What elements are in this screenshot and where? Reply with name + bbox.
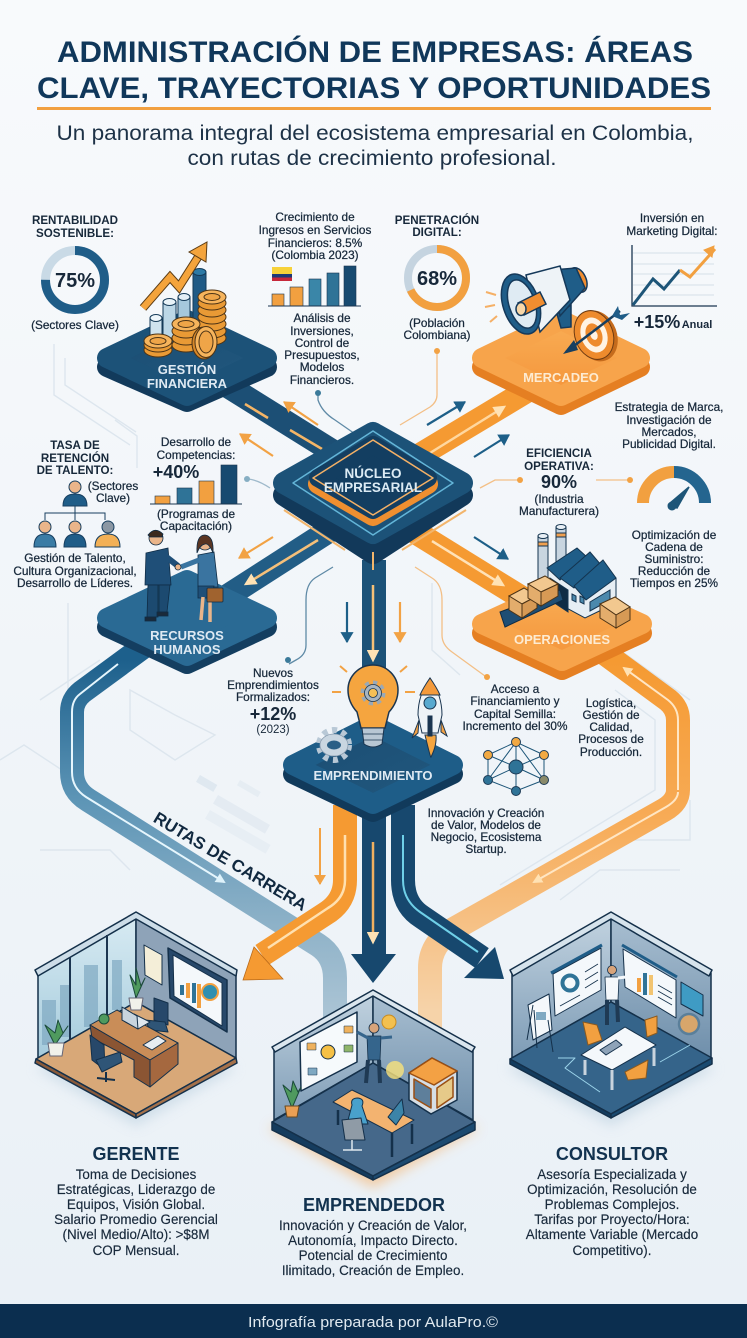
metric: Nuevos Emprendimientos: Emprendimientos [227,678,319,692]
icon: conveyor with boxes [500,576,630,628]
text: Estrategia de Marca: Mercados, [641,425,697,439]
panel: Gestión Financiera [107,242,267,402]
metric: Desarrollo de Competencias: (Programas de [157,507,235,521]
caption: Emprendedor [279,1195,467,1278]
chairs [583,1016,657,1080]
line chart [632,245,717,306]
chair front [90,1035,122,1082]
text: Análisis de Inversiones: Presupuestos, [284,348,360,362]
platform [293,725,453,812]
glowing core [313,440,433,516]
icon: light bulb on wall [382,1015,396,1029]
metric: Tasa de Retención de Talento: (Sectores [88,479,138,493]
metric: Nuevos Emprendimientos: Nuevos [253,666,293,680]
text: Estrategia de Marca: Estrategia de Marca, [615,400,723,414]
platform [284,431,462,553]
text: Logística: Producción. [580,745,642,759]
plants [45,968,145,1056]
metric: Eficiencia Operativa [519,447,599,518]
metric: Eficiencia Operativa: EFICIENCIA [526,447,592,460]
platform [482,320,640,405]
leader lines [244,348,633,680]
inventor figure [357,1023,392,1083]
metric: Tasa de Retención de Talento: DE TALENTO: [37,464,113,477]
metric: Inversión en Marketing Digital: Marketing Digital: [626,224,718,238]
metric: Acceso a Financiamiento: Incremento del 30% [463,719,568,733]
caption: Consultor [526,1144,698,1258]
text: Gestión de Talento: Cultura Organizacional, [13,564,137,578]
road: Gestión Financiera link [210,375,340,456]
text: Optimización de Cadena: Tiempos en 25% [630,576,719,590]
text: Optimización de Cadena: Reducción de [638,564,711,578]
caption: Gerente [54,1144,218,1258]
metric: Acceso a Financiamiento [463,682,568,733]
icon: target with arrow [563,305,630,367]
wall screen [168,948,227,1032]
text: Logística: Logística, [586,696,636,710]
metric: Desarrollo de Competencias: +40% [153,462,199,482]
metric: Eficiencia Operativa: 90% [541,472,577,492]
footer [0,1304,747,1338]
caption: Consultor: Asesoría Especializada y [537,1167,687,1182]
metric: Eficiencia Operativa: Manufacturera) [519,504,599,518]
metric: Tasa de Retención de Talento: Clave) [96,491,130,505]
text: Innovación y Creación: Negocio, Ecosistema [431,830,542,844]
caption: Consultor: Competitivo). [573,1243,651,1258]
consultant figure [605,966,634,1025]
office chair behind desk [145,998,168,1032]
metric: Inversión en Marketing Digital [626,211,718,332]
metric: Desarrollo de Competencias [150,435,242,533]
text: Análisis de Inversiones: Modelos [300,360,344,374]
icon: gauge [643,472,705,510]
3D printer [409,1058,457,1114]
icon: rays [332,666,415,692]
icon: rocket [412,678,447,757]
text: Optimización de Cadena: Cadena de [645,540,703,554]
room shell [510,912,712,1118]
platform [107,580,267,664]
text: Análisis de Inversiones: Control de [295,336,350,350]
caption: Emprendedor: Potencial de Crecimiento [299,1248,447,1263]
metric: Rentabilidad Sostenible: SOSTENIBLE: [36,227,114,240]
metric: Acceso a Financiamiento: Capital Semilla: [474,707,556,721]
text: Innovación y Creación [428,806,544,856]
label: NÚCLEO [344,466,402,481]
metric: Penetración Digital: (Población [409,316,465,330]
label: OPERACIONES [514,632,610,647]
caption: Gerente: GERENTE [92,1144,180,1164]
icon: sound rays [485,292,497,322]
label [324,466,422,495]
career route: left blue path [72,642,335,1025]
bar chart [150,465,242,504]
title underline [37,107,711,110]
subtitle: Un panorama integral del ecosistema empresarial en Colombia, [56,122,694,145]
metric: Tasa de Retención de Talento: TASA DE [50,439,100,452]
road: central vertical link [362,560,386,735]
text: Estrategia de Marca [615,400,723,451]
panel: Operaciones [482,524,642,670]
decorative dial [679,1014,699,1034]
metric: Inversión en Marketing Digital: +15% [634,312,680,332]
text: Innovación y Creación: de Valor, Modelos de [431,818,541,832]
glowing bulb [386,1061,404,1079]
label: FINANCIERA [147,376,228,391]
small arrows around the core [239,402,509,884]
metric: Inversión en Marketing Digital: Anual [682,319,712,331]
text: Logística: Procesos de [578,732,644,746]
road: Operaciones link [412,530,535,606]
metric: Eficiencia Operativa: (Industria [534,492,584,506]
donut chart 68%: 68% [417,268,457,290]
metric: Acceso a Financiamiento: Financiamiento y [470,694,560,708]
metric: Desarrollo de Competencias: Competencias: [157,448,235,462]
metric: Nuevos Emprendimientos: +12% [250,704,296,724]
metric: Crecimiento de Ingresos [259,210,371,306]
bar chart [268,266,361,306]
text: Gestión de Talento: Gestión de Talento, [24,551,126,565]
metric: Crecimiento de Ingresos: (Colombia 2023) [271,248,359,262]
metric: Penetración Digital: DIGITAL: [412,226,462,239]
icon: org chart [34,481,120,547]
icon: megaphone [494,265,591,339]
text: Optimización de Cadena: Suministro: [644,552,704,566]
desk [90,1007,178,1087]
subtitle: con rutas de crecimiento profesional. [188,147,556,170]
icon: coin stacks [144,290,226,359]
label [147,362,228,391]
platform [482,587,642,670]
desk with laptop [333,1090,414,1157]
label: HUMANOS [153,642,221,657]
subtitle [56,122,694,170]
platform [107,320,267,402]
donut chart 75%: 75% [55,270,95,292]
career route: right orange path [430,650,678,1030]
caption: Consultor: CONSULTOR [556,1144,668,1164]
title [37,35,711,105]
road: Mercadeo link [415,383,540,458]
metric: Rentabilidad Sostenible: RENTABILIDAD [32,214,118,227]
metric: Penetración Digital: Colombiana) [404,328,471,342]
roads below [243,805,504,983]
metric: Penetración Digital [395,214,479,342]
icon: lightbulb with gear [348,665,398,747]
caption: Consultor: Altamente Variable (Mercado [526,1227,698,1242]
room shell [35,912,237,1118]
icon: handshake figures [145,530,223,622]
metric: Nuevos Emprendimientos: (2023) [256,724,290,736]
presentation left [551,945,602,1016]
metric: Rentabilidad Sostenible [31,214,119,332]
panel: Gerente office [35,912,237,1126]
caption: Gerente: Toma de Decisiones [76,1167,197,1182]
metric: Desarrollo de Competencias: Capacitación) [160,519,232,533]
metric: Rentabilidad Sostenible: (Sectores Clave) [31,318,119,332]
caption: Consultor: Optimización, Resolución de [527,1182,697,1197]
panel: Consultor room [506,912,716,1126]
text: Estrategia de Marca: Investigación de [626,413,712,427]
text: Gestión de Talento: Desarrollo de Líderes. [17,576,133,590]
caption: Consultor: Problemas Complejos. [545,1197,679,1212]
label: GESTIÓN [158,362,216,377]
panel: Recursos Humanos [107,530,267,664]
caption: Emprendedor: Ilimitado, Creación de Empleo. [282,1263,464,1278]
text: Logística: Calidad, [589,720,633,734]
whiteboard [300,1012,357,1091]
panel: Emprendedor workshop [268,990,479,1188]
skyline [42,960,122,1045]
panel: Emprendimiento [243,665,504,983]
metric: Crecimiento de Ingresos: Financieros: 8.5% [268,236,363,250]
text: Optimización de Cadena [630,528,719,590]
flip chart [527,994,553,1052]
route label: RUTAS DE CARRERA [150,808,310,915]
caption: Gerente: COP Mensual. [93,1243,179,1258]
metric: Acceso a Financiamiento: Acceso a [491,682,540,696]
title: CLAVE, TRAYECTORIAS Y OPORTUNIDADES [37,72,711,105]
panel: Núcleo Empresarial [284,431,466,570]
room shell [272,990,475,1180]
presentation right [622,945,677,1018]
metric: Tasa de Retención de Talento: RETENCIÓN [41,452,109,465]
icon: rising bars [150,268,206,348]
icon: network [484,738,548,796]
caption: Emprendedor: Innovación y Creación de Valor, [279,1218,467,1233]
caption: Gerente: (Nivel Medio/Alto): >$8M [63,1227,209,1242]
decorative circuit lines [0,344,690,900]
text: Análisis de Inversiones [284,311,360,387]
caption: Gerente: Estratégicas, Liderazgo de [57,1182,215,1197]
floor circuits [558,1045,690,1092]
caption: Consultor: Tarifas por Proyecto/Hora: [534,1212,690,1227]
icon: Colombian flag [272,267,292,281]
icon: gear [319,730,349,760]
title: ADMINISTRACIÓN DE EMPRESAS: ÁREAS [57,35,693,69]
metric: Crecimiento de Ingresos: Crecimiento de [275,210,355,224]
text: Análisis de Inversiones: Análisis de [293,311,351,325]
metric: Inversión en Marketing Digital: Inversión en [640,211,704,225]
text: Análisis de Inversiones: Inversiones, [290,324,354,338]
road: Recursos Humanos link [212,527,335,606]
plant [283,1081,301,1117]
metric: Nuevos Emprendimientos [227,666,319,736]
panel: Mercadeo [482,265,640,405]
label [150,628,224,657]
label: RECURSOS [150,628,224,643]
metric: Eficiencia Operativa: OPERATIVA: [524,460,594,473]
text: Logística: Gestión de [582,708,640,722]
wall poster [144,945,162,985]
label: EMPRENDIMIENTO [314,768,432,783]
text: Optimización de Cadena: Optimización de [632,528,717,542]
metric: Tasa de Retención de Talento [34,439,138,547]
label: EMPRESARIAL [324,480,422,495]
text: Gestión de Talento [13,551,137,590]
icon: factory [538,524,616,618]
screen small [681,982,703,1016]
edge highlights [284,510,466,570]
label: MERCADEO [523,370,599,385]
caption: Emprendedor: EMPRENDEDOR [303,1195,445,1215]
caption: Emprendedor: Autonomía, Impacto Directo. [288,1233,458,1248]
metric: Desarrollo de Competencias: Desarrollo de [161,435,232,449]
caption: Gerente: Salario Promedio Gerencial [54,1212,218,1227]
meeting table [581,1027,656,1090]
text: Análisis de Inversiones: Financieros. [290,373,354,387]
text: Innovación y Creación: Innovación y Creación [428,806,544,820]
text: Estrategia de Marca: Publicidad Digital. [622,437,716,451]
footer: Infografía preparada por AulaPro.© [248,1314,498,1331]
text: Innovación y Creación: Startup. [465,842,507,856]
metric: Crecimiento de Ingresos: Ingresos en Servicios [259,223,371,237]
icon: rising arrow [143,242,207,308]
metric: Penetración Digital: PENETRACIÓN [395,214,479,227]
text: Logística [578,696,644,759]
metric: Nuevos Emprendimientos: Formalizados: [236,690,310,704]
caption: Gerente: Equipos, Visión Global. [67,1197,205,1212]
